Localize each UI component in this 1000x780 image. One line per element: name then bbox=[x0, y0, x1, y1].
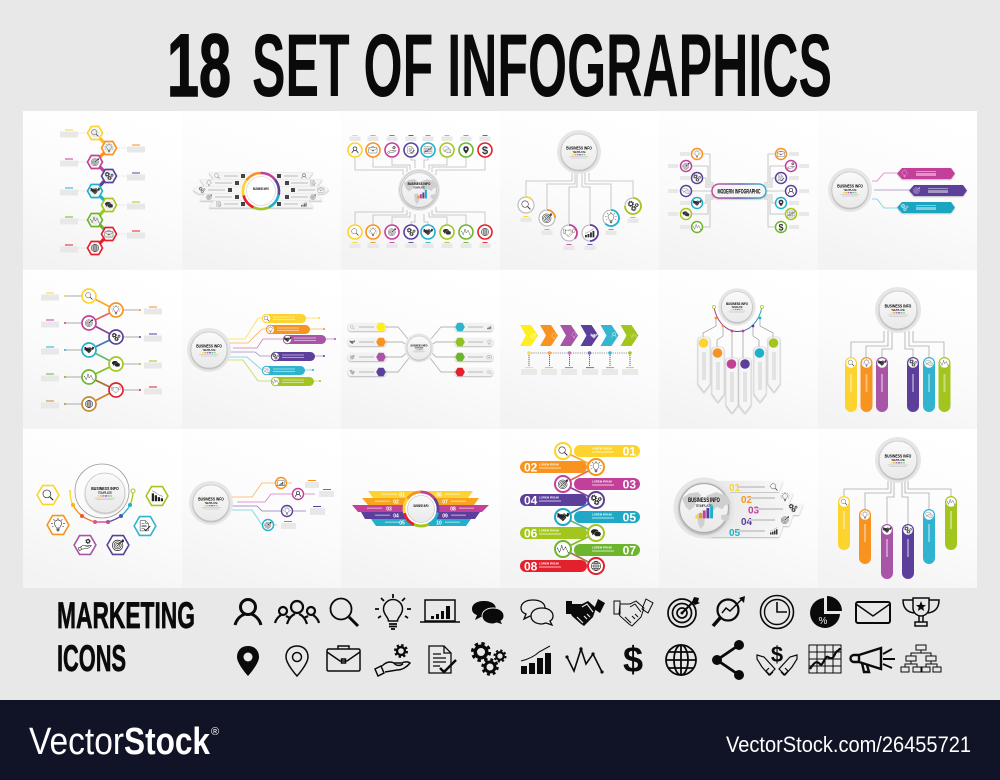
globe hub bbox=[674, 478, 734, 538]
panel 14: hub with four branching nodes bbox=[189, 478, 334, 530]
panel 16: numbered serpentine list: 03 bbox=[623, 478, 636, 492]
business info hub bbox=[875, 287, 921, 333]
business info hub: TEMPLATE bbox=[731, 305, 743, 309]
panel 16: numbered serpentine list: LOREM IPSUM bbox=[539, 496, 559, 500]
panel 15: ring with coloured wing strips: 07 bbox=[442, 500, 448, 506]
globe hub: BUSINESS INFO bbox=[408, 182, 430, 186]
business info hub bbox=[85, 473, 125, 513]
panel 16: numbered serpentine list: 05 bbox=[623, 510, 636, 524]
panel 13: hub with arc and six hexagons bbox=[37, 464, 168, 554]
panel 3: sixteen node tree around a globe hub bbox=[348, 135, 492, 248]
panel 16: numbered serpentine list: 02 bbox=[524, 460, 538, 474]
panel 17: globe hub with five numbered strips: 01 bbox=[729, 483, 741, 494]
panel 15: ring with coloured wing strips: 06 bbox=[436, 492, 442, 498]
panel 2: ring with ten fins bbox=[193, 172, 329, 209]
business info hub: TEMPLATE bbox=[202, 348, 216, 352]
business info hub: BUSINESS INFO bbox=[198, 496, 224, 501]
panel 16: numbered serpentine list bbox=[520, 443, 640, 574]
business info hub: BUSINESS INFO bbox=[837, 183, 863, 188]
business info hub bbox=[404, 334, 434, 362]
footer image id: VectorStock.com/26455721 bbox=[726, 732, 971, 757]
panel 1: hexagon vertical timeline bbox=[60, 126, 145, 254]
panel 16: numbered serpentine list: 08 bbox=[524, 560, 538, 574]
panel 16: numbered serpentine list: 04 bbox=[524, 494, 538, 508]
panel 17: globe hub with five numbered strips: 02 bbox=[741, 495, 753, 506]
business info hub: TEMPLATE bbox=[891, 308, 905, 312]
panel 16: numbered serpentine list: LOREM IPSUM bbox=[592, 512, 612, 516]
hub caption: BUSINESS INFO bbox=[253, 187, 269, 191]
footer logo: ® bbox=[211, 726, 219, 738]
globe hub: TEMPLATE bbox=[695, 504, 713, 508]
title bbox=[167, 15, 832, 115]
globe hub bbox=[398, 169, 440, 211]
marketing icon row 1 bbox=[235, 594, 939, 629]
panel 15: ring with coloured wing strips: 10 bbox=[436, 520, 442, 526]
footer logo: Vector bbox=[29, 721, 124, 763]
panel 6: hub with three arrow tags bbox=[828, 168, 967, 213]
business info hub: BUSINESS INFO bbox=[196, 343, 222, 348]
panel 16: numbered serpentine list: 01 bbox=[623, 444, 636, 458]
title: 18 bbox=[167, 15, 231, 115]
business info hub bbox=[189, 481, 233, 525]
business info hub: TEMPLATE bbox=[843, 188, 857, 192]
marketing icons heading: MARKETING bbox=[57, 595, 195, 636]
panel 16: numbered serpentine list: LOREM IPSUM bbox=[539, 462, 559, 466]
panel 11: hub with arc of dots and hanging cards bbox=[698, 288, 780, 413]
footer logo: Stock bbox=[124, 721, 211, 763]
business info hub: TEMPLATE bbox=[572, 150, 586, 154]
panel 16: numbered serpentine list: 07 bbox=[623, 544, 636, 558]
marketing icons heading bbox=[57, 595, 195, 679]
panel 16: numbered serpentine list: LOREM IPSUM bbox=[592, 546, 612, 550]
business info hub bbox=[828, 168, 872, 212]
globe hub: BUSINESS INFO bbox=[688, 497, 720, 504]
footer bar bbox=[0, 700, 1000, 780]
panel 16: numbered serpentine list: LOREM IPSUM bbox=[539, 562, 559, 566]
panel 17: globe hub with five numbered strips: 03 bbox=[748, 506, 760, 516]
panel 16: numbered serpentine list: 06 bbox=[524, 526, 538, 540]
business info hub bbox=[875, 437, 921, 483]
business info hub: BUSINESS INFO bbox=[726, 301, 748, 306]
panel 15: ring with coloured wing strips: 09 bbox=[442, 514, 448, 520]
panel 12: hub with six capsules bbox=[845, 287, 950, 412]
panel 7: circle vertical timeline bbox=[41, 289, 162, 411]
business info hub bbox=[718, 288, 756, 326]
panel 9: hub with eight labelled strips bbox=[348, 323, 493, 376]
business info hub: BUSINESS INFO bbox=[411, 343, 428, 347]
business info hub: BUSINESS INFO bbox=[885, 303, 912, 309]
panel 10: chevron process with timeline bbox=[520, 325, 638, 375]
arc of dots bbox=[712, 306, 764, 332]
panel 15: ring with coloured wing strips: 02 bbox=[393, 500, 399, 506]
arc of dots bbox=[70, 491, 133, 522]
business info hub: BUSINESS INFO bbox=[91, 486, 119, 492]
business info hub bbox=[557, 130, 601, 174]
business info hub: BUSINESS INFO bbox=[885, 453, 912, 459]
hub caption: BUSINESS INFO bbox=[414, 504, 429, 508]
panel 15: ring with coloured wing strips: 01 bbox=[399, 492, 405, 498]
panel 17: globe hub with five numbered strips: 04 bbox=[741, 517, 753, 528]
modern infographic pill bbox=[712, 184, 766, 198]
modern infographic pill: MODERN INFOGRAPHIC bbox=[718, 188, 761, 196]
panel 16: numbered serpentine list: LOREM IPSUM bbox=[592, 480, 612, 484]
panel 15: ring with coloured wing strips: 08 bbox=[450, 506, 456, 512]
business info hub: TEMPLATE bbox=[98, 491, 113, 495]
panel 16: numbered serpentine list: LOREM IPSUM bbox=[539, 528, 559, 532]
business info hub bbox=[187, 328, 231, 372]
marketing icon row 2 bbox=[237, 639, 941, 680]
panel 8: hub with six coloured pills and circuit lines bbox=[187, 314, 336, 386]
tile background grid bbox=[23, 111, 977, 588]
panel 17: globe hub with five numbered strips bbox=[674, 478, 803, 539]
panel 15: ring with coloured wing strips: 05 bbox=[399, 520, 405, 526]
panel 5: modern infographic pill with two node columns bbox=[668, 148, 809, 232]
panel 15: ring with coloured wing strips: 03 bbox=[386, 506, 392, 512]
business info hub: BUSINESS INFO bbox=[566, 145, 592, 150]
panel 15: ring with coloured wing strips bbox=[352, 491, 489, 526]
business info hub: TEMPLATE bbox=[891, 458, 905, 462]
business info hub: TEMPLATE bbox=[415, 347, 424, 350]
panel 17: globe hub with five numbered strips: 05 bbox=[729, 528, 741, 539]
business info hub: TEMPLATE bbox=[204, 501, 218, 505]
panel 18: hub with six staggered capsules bbox=[838, 437, 957, 579]
footer logo bbox=[29, 721, 219, 763]
globe hub: TEMPLATE bbox=[413, 186, 425, 189]
marketing icons heading: ICONS bbox=[57, 638, 126, 679]
panel 15: ring with coloured wing strips: 04 bbox=[393, 514, 399, 520]
panel 16: numbered serpentine list: LOREM IPSUM bbox=[592, 446, 612, 450]
panel 4: org tree with progress rings bbox=[518, 130, 641, 250]
